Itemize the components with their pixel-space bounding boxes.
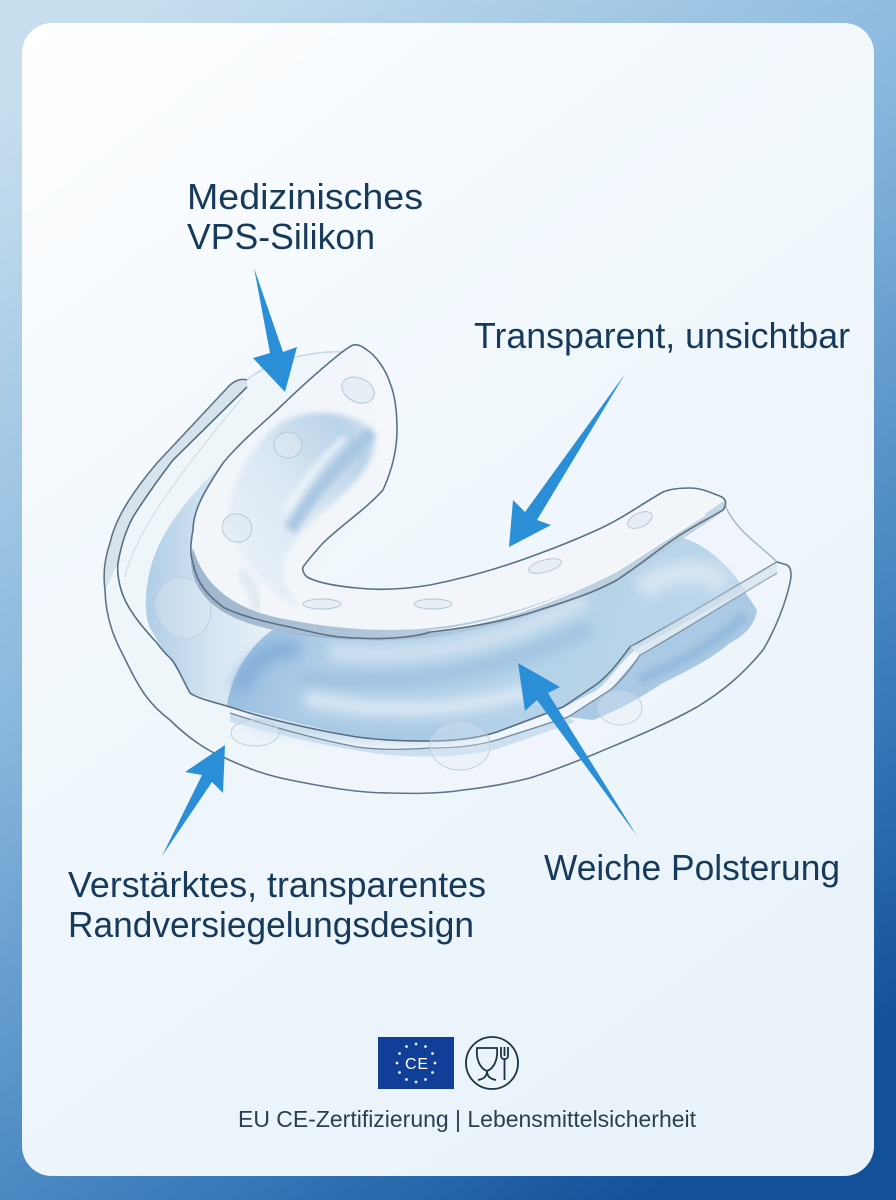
inner outline — [191, 345, 726, 639]
footer certification text: EU CE-Zertifizierung | Lebensmittelsicherheit — [238, 1106, 696, 1132]
label: Verstärktes, transparentes Randversiegelungsdesign: Randversiegelungsdesign — [68, 904, 474, 945]
inner tray — [191, 345, 726, 639]
outer tray rim — [118, 387, 777, 741]
inner dimples — [217, 372, 655, 609]
rim second line — [230, 573, 777, 749]
label: Medizinisches VPS-Silikon: Medizinisches — [187, 176, 423, 217]
label: Transparent, unsichtbar: Transparent, unsichtbar — [474, 315, 850, 356]
arrow: Weiche Polsterung — [518, 663, 637, 836]
arrow: Randversiegelungsdesign — [162, 745, 225, 856]
illustration: transparent mouth guard — [104, 345, 791, 793]
arrow: Transparent, unsichtbar — [509, 374, 625, 547]
arrow: Medizinisches VPS-Silikon — [253, 268, 297, 392]
pad front — [227, 537, 745, 741]
outer tray — [104, 352, 791, 793]
inner highlight — [430, 515, 705, 631]
faint inner wall line — [125, 397, 243, 577]
label: Weiche Polsterung: Weiche Polsterung — [544, 847, 840, 888]
outer tray outline — [104, 379, 791, 793]
inner edge thickness — [191, 500, 725, 640]
icon: EU CE flag — [378, 1037, 454, 1089]
outer dimples — [145, 568, 642, 770]
pad highlights — [240, 572, 725, 735]
icon: food safe glass and fork — [466, 1037, 518, 1089]
rim band right — [630, 562, 777, 655]
pad below rim on the right — [568, 592, 757, 720]
inner pad — [228, 413, 374, 610]
back wall curve — [247, 352, 345, 380]
label: Medizinisches VPS-Silikon: VPS-Silikon — [187, 216, 375, 257]
blue band under rim — [230, 713, 575, 757]
rim band left — [104, 379, 247, 590]
icon: EU CE flag: CE — [405, 1056, 428, 1073]
label: Verstärktes, transparentes Randversiegelungsdesign: Verstärktes, transparentes — [68, 864, 486, 905]
pad back — [146, 458, 270, 706]
